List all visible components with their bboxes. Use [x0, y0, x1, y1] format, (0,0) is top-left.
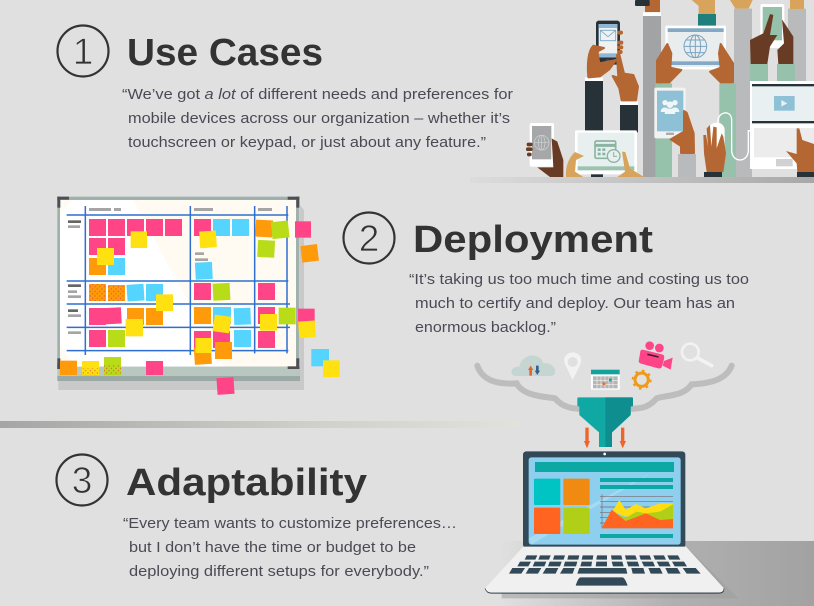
icon: magnifier: [682, 344, 712, 366]
quote: use cases: mobile devices across our organization – whether it’s: [128, 110, 510, 127]
icon: phone with globe: [530, 123, 554, 167]
icon: gear: [633, 371, 651, 389]
number badge 3: 3: [72, 460, 92, 501]
section divider band top: [470, 177, 814, 183]
white reflection: [60, 200, 223, 367]
icon: calendar: [591, 370, 620, 390]
pointing hand: [613, 54, 638, 100]
sticky notes: pink: [89, 219, 315, 395]
board surface: [60, 200, 296, 367]
section 3: adaptability: [56, 454, 457, 580]
number badge 3: [56, 454, 108, 506]
icon: laptop with video: [750, 81, 814, 169]
number badge 1: [58, 26, 108, 76]
illustration: hands holding devices: [526, 0, 814, 177]
tan hands holding tablet: [566, 152, 644, 177]
icon: phone with mail: [596, 21, 620, 65]
quote: adaptability: [123, 515, 457, 580]
area chart: [600, 494, 673, 528]
floor behind laptop: [500, 541, 814, 606]
funnel: [577, 397, 633, 447]
quote: adaptability: but I don’t have the time or budget to be: [129, 539, 416, 556]
icon: cloud: [511, 356, 555, 376]
sticky notes: yellow: [82, 230, 340, 377]
arrows: [584, 428, 626, 448]
keyboard: [509, 555, 701, 586]
section divider band middle: [0, 421, 520, 428]
dark hands: [750, 14, 793, 64]
icon: tablet held by dark hands: [760, 4, 784, 48]
icon: tablet with globe: [665, 26, 726, 69]
quote: use cases: [122, 86, 513, 151]
dark fingertips: [526, 143, 533, 156]
sleeves and arms: [585, 9, 806, 177]
hands holding tablet: [657, 44, 681, 82]
quote: deployment: enormous backlog.”: [415, 319, 556, 336]
sticky notes: orange: [60, 220, 319, 375]
icon: tablet with people: [654, 88, 686, 138]
icon: map pin: [564, 352, 581, 380]
fingers on phone: [617, 31, 623, 54]
board shelf: [57, 367, 300, 376]
number badge 1: 1: [73, 31, 93, 72]
hand on mouse: [703, 123, 726, 177]
laptop screen: [529, 457, 681, 545]
icon: video camera: [639, 341, 673, 370]
dotted note texture: [82, 284, 125, 375]
quote: deployment: “It’s taking us too much time and costing us too: [409, 271, 749, 288]
number badge 2: 2: [359, 218, 379, 259]
quote: deployment: much to certify and deploy. Our team has an: [415, 295, 735, 312]
dark hand holding phone: [537, 138, 563, 177]
number badge 2: [344, 212, 394, 264]
pointing hand on laptop: [786, 128, 814, 172]
quote: adaptability: deploying different setups for everybody.”: [129, 563, 429, 580]
quote: adaptability: “Every team wants to customize preferences…: [123, 515, 457, 532]
mouse cable: [718, 113, 751, 160]
laptop base: [485, 547, 724, 592]
quote: use cases: “We’ve got a lot of different needs and preferences for: [122, 86, 513, 103]
hand holding phone: [588, 46, 616, 77]
hand holding tablet right: [671, 111, 694, 153]
quote: deployment: [409, 271, 749, 336]
column and row labels: [68, 208, 272, 334]
illustration: funnel into laptop: [477, 341, 738, 598]
section 1: use cases: [58, 26, 513, 151]
corner brackets: [57, 197, 299, 369]
laptop lid: [523, 451, 685, 548]
grid lines: [67, 206, 290, 355]
board shadow: [58, 205, 304, 390]
icon: tablet with calendar: [575, 130, 637, 177]
heading: deployment: Deployment: [413, 219, 653, 261]
board frame: [57, 197, 299, 369]
heading: use cases: Use Cases: [127, 32, 323, 74]
top hands: [635, 0, 804, 14]
cloud shaped tray: [477, 366, 732, 409]
laptop shadow: [502, 547, 738, 598]
sticky notes: blue: [108, 219, 329, 366]
heading: adaptability: Adaptability: [126, 462, 367, 504]
section 2: deployment: [344, 212, 749, 336]
quote: use cases: touchscreen or keypad, or just about any feature.”: [128, 134, 486, 151]
sticky notes: green: [104, 220, 296, 375]
illustration: kanban board: [57, 197, 340, 395]
